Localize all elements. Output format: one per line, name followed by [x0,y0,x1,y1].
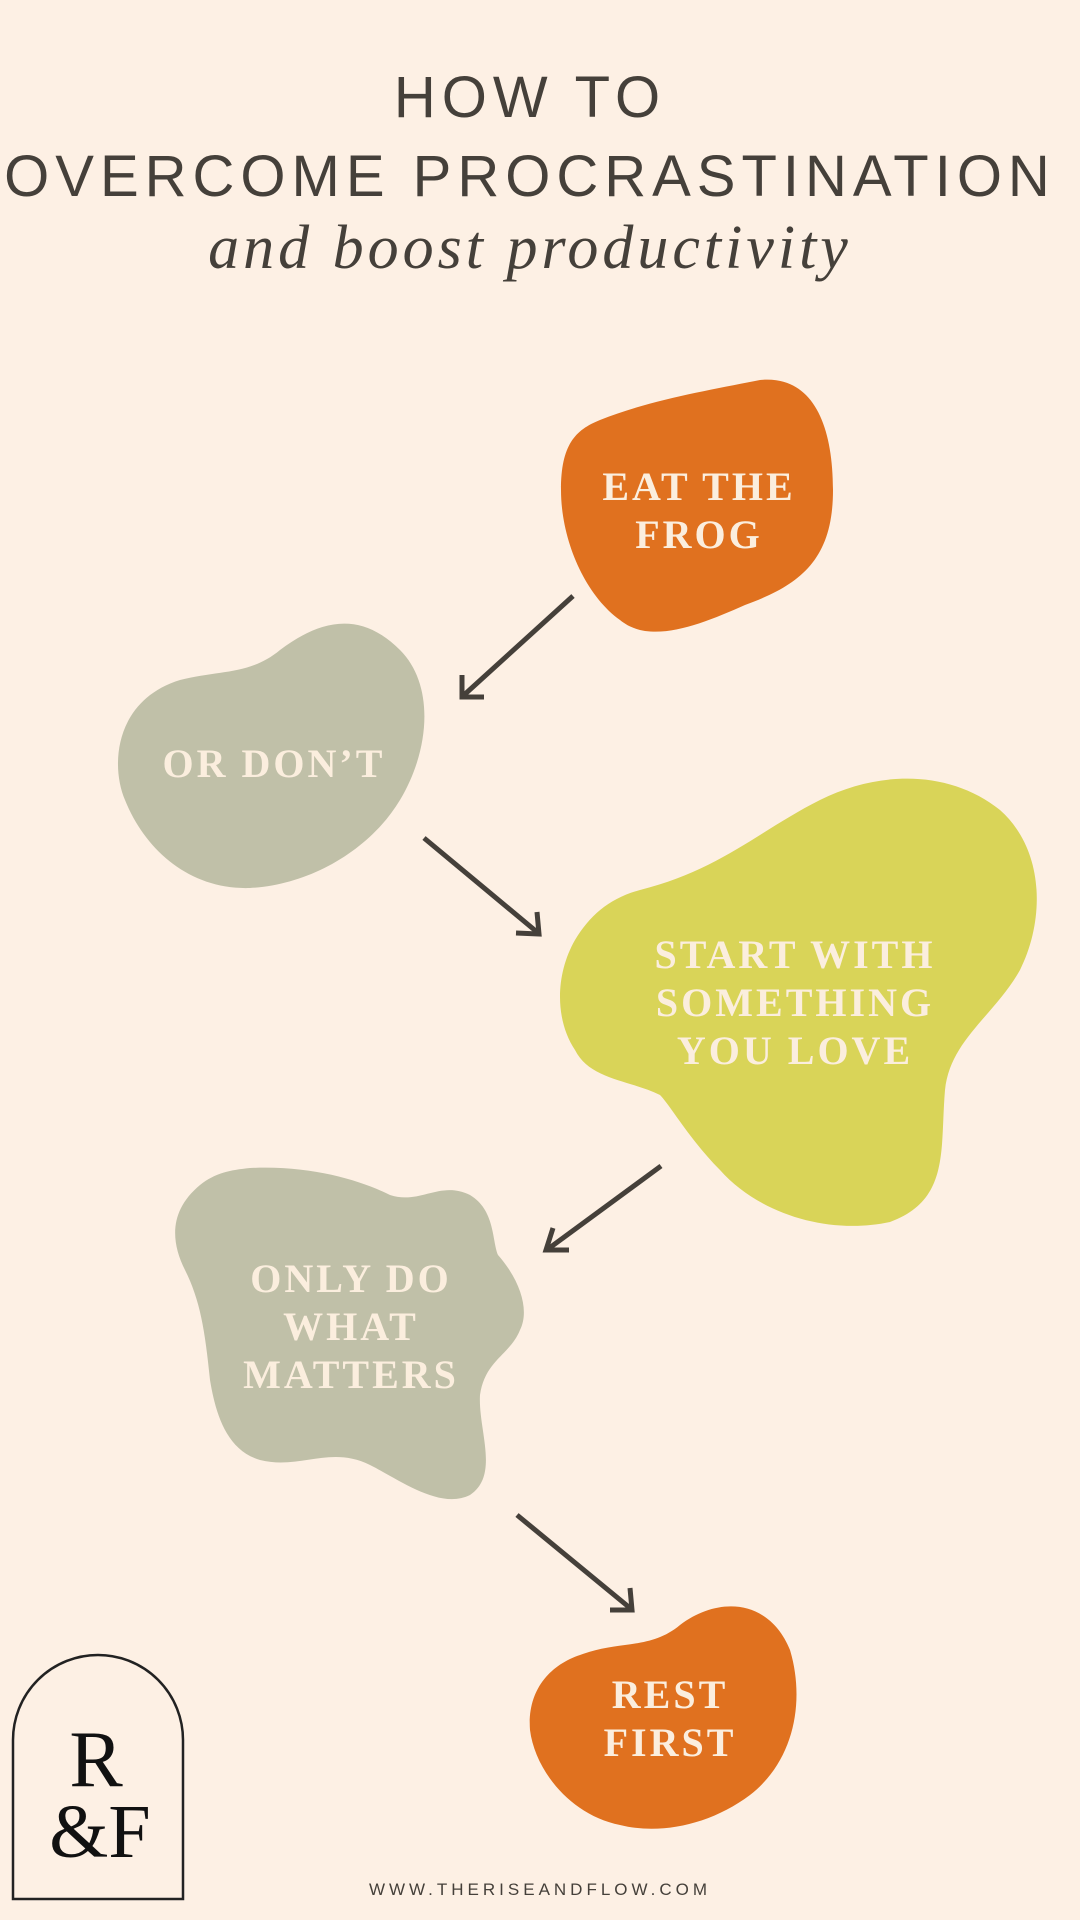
step 5: rest first: FIRST [604,1720,736,1765]
step 4: only do what matters: WHAT [283,1304,419,1349]
step 3: start with something you love: YOU LOVE [677,1028,913,1073]
footer url: WWW.THERISEANDFLOW.COM [369,1880,711,1899]
step 3: start with something you love: SOMETHING [656,980,934,1025]
step 4: only do what matters: ONLY DO [250,1256,452,1301]
title: HOW TO [394,65,666,130]
step 4: only do what matters [175,1168,524,1499]
logo: &F [49,1790,151,1874]
step 1: eat the frog [561,380,833,632]
logo: R [69,1716,123,1804]
arrow 2 [424,838,539,934]
logo [13,1655,183,1899]
step 3: start with something you love [560,779,1037,1226]
title [4,65,1056,209]
arrow 3 [546,1166,661,1250]
arrow 4 [517,1515,632,1610]
step 1: eat the frog: EAT THE [602,464,796,509]
title: OVERCOME PROCRASTINATION [4,144,1056,209]
step 2: or don't: OR DON’T [163,741,385,786]
step 2: or don't [118,624,424,888]
step 5: rest first [530,1606,797,1829]
step 1: eat the frog: FROG [635,512,763,557]
subtitle script: and boost productivity [208,214,852,282]
arrow 1 [462,596,573,697]
step 3: start with something you love: START WITH [655,932,935,977]
step 4: only do what matters: MATTERS [243,1352,459,1397]
step 5: rest first: REST [612,1672,728,1717]
